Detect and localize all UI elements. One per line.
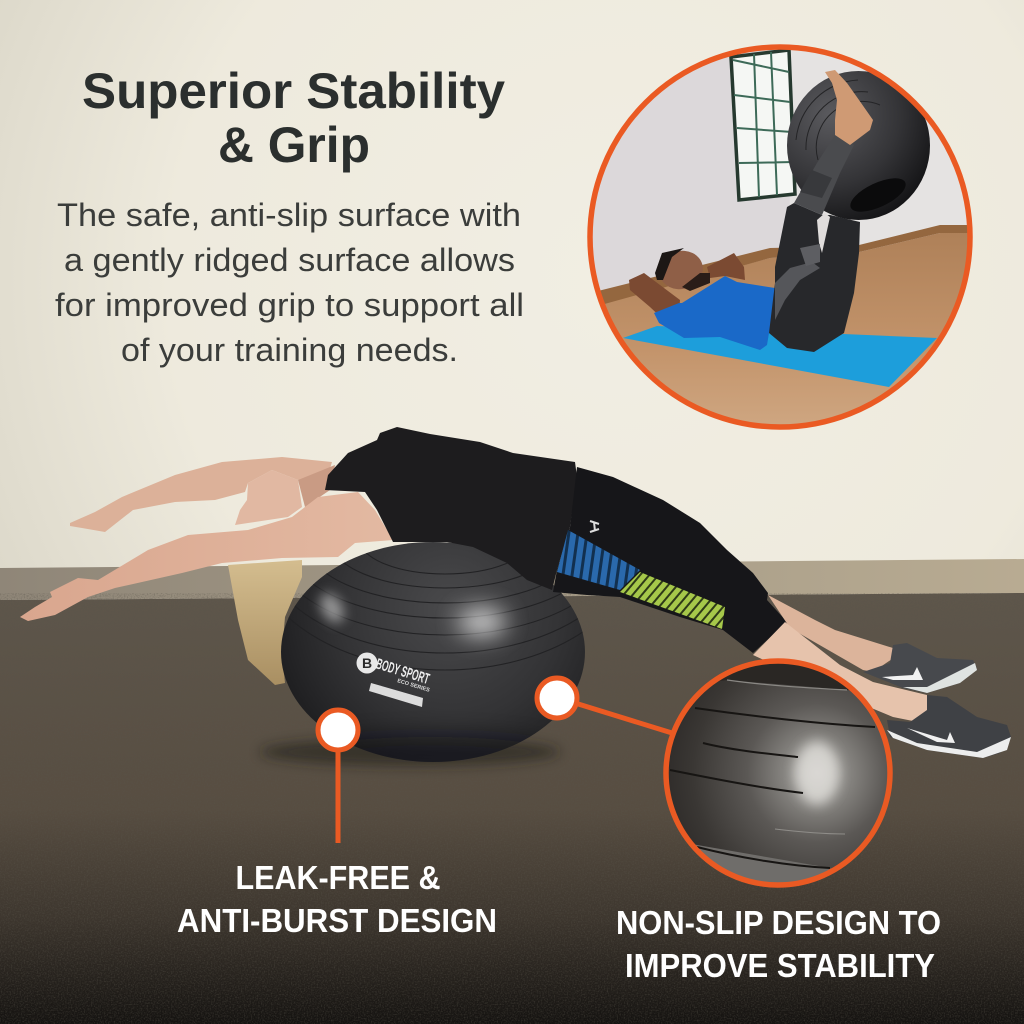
- wall background: [0, 0, 1024, 605]
- description text: for improved grip to support all: [55, 287, 524, 323]
- callout: leak-free: [177, 710, 497, 939]
- exercise ball: [281, 542, 585, 762]
- description text: The safe, anti-slip surface with: [57, 197, 521, 233]
- far leg: [768, 595, 895, 672]
- woman on exercise ball: [20, 427, 1011, 773]
- carpet floor: [0, 593, 1024, 1024]
- callout: non-slip: [537, 650, 941, 984]
- head and neck: [235, 448, 368, 525]
- callout: non-slip: IMPROVE STABILITY: [625, 947, 935, 984]
- far shoe: [863, 643, 977, 693]
- foot: [825, 70, 873, 145]
- callout: leak-free: ANTI-BURST DESIGN: [177, 902, 497, 939]
- near arm: [20, 492, 393, 621]
- floor skirting: [590, 225, 977, 308]
- blue legging stripe: [557, 530, 640, 590]
- arms behind head: [629, 253, 745, 312]
- exercise ball: [787, 71, 930, 220]
- inset photo: man doing crunches with ball: [585, 40, 977, 435]
- leggings: [553, 467, 787, 653]
- title: [82, 63, 505, 173]
- carpet texture: [0, 593, 1024, 1024]
- ball logo: ECO SERIES: [396, 678, 431, 694]
- near leg: [753, 622, 928, 722]
- ball logo: B: [362, 655, 372, 671]
- baseboard: [0, 559, 1024, 600]
- title: & Grip: [218, 117, 370, 173]
- far arm: [70, 457, 332, 532]
- title: Superior Stability: [82, 63, 505, 119]
- window: [731, 50, 795, 200]
- callout: leak-free: LEAK-FREE &: [236, 859, 440, 896]
- black tank top: [325, 427, 577, 590]
- blue mat: [623, 326, 937, 387]
- description text: [55, 197, 524, 368]
- ball logo: [356, 652, 431, 707]
- inset frame: [590, 47, 970, 427]
- green legging stripe: [620, 572, 725, 629]
- head: [655, 248, 710, 291]
- wood floor: [605, 233, 968, 424]
- near shoe: [887, 695, 1011, 758]
- ball shadow: [260, 738, 560, 766]
- blue shirt: [654, 276, 775, 350]
- magnified ball surface: [663, 658, 893, 888]
- description text: of your training needs.: [121, 332, 458, 368]
- legging logo: [590, 521, 599, 532]
- hair: [228, 560, 302, 685]
- ball logo: BODY SPORT: [374, 656, 431, 688]
- callout: non-slip: NON-SLIP DESIGN TO: [616, 904, 941, 941]
- leggings: [769, 135, 860, 352]
- description text: a gently ridged surface allows: [64, 242, 515, 278]
